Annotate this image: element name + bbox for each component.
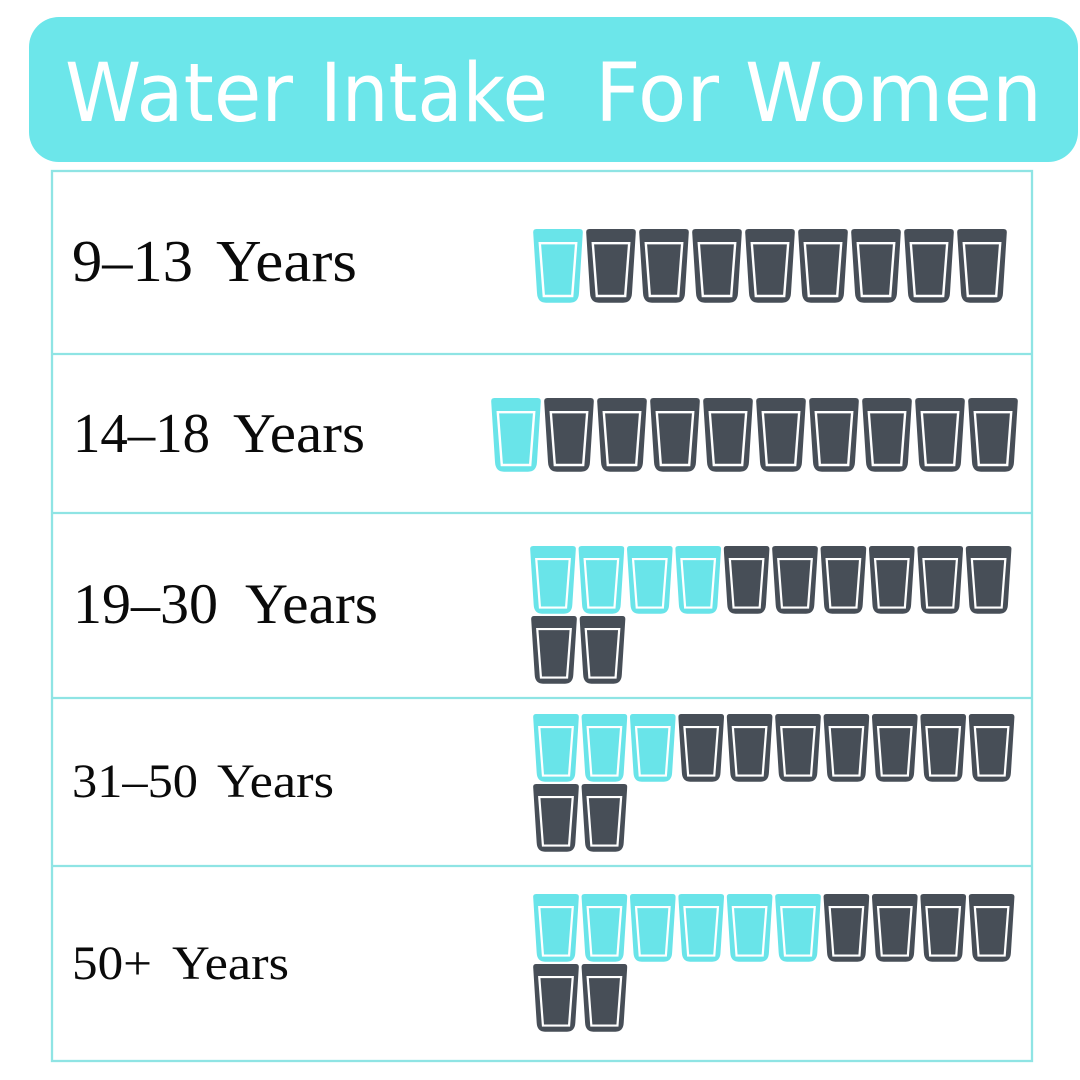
table grid <box>52 171 1032 1061</box>
title text: Water <box>65 47 294 141</box>
icons: 3 of 12 glasses filled <box>533 714 1014 852</box>
icons: 1 of 10 glasses filled <box>491 398 1018 472</box>
label: 50+ years: 50+ <box>72 937 152 990</box>
label: 19–30 years: Years <box>245 573 378 636</box>
label: 9–13 years: 9–13 <box>72 228 193 294</box>
label: 50+ years: Years <box>172 937 289 990</box>
title text: For <box>595 47 720 141</box>
row: 14–18 years <box>73 398 1018 472</box>
icons: 4 of 12 glasses filled <box>530 546 1011 684</box>
label: 14–18 years: 14–18 <box>73 403 210 465</box>
title banner <box>29 17 1078 162</box>
title text: Intake <box>320 47 548 141</box>
label: 9–13 years: Years <box>216 228 357 294</box>
row: 31–50 years <box>72 714 1014 852</box>
label: 31–50 years: 31–50 <box>72 755 198 808</box>
row: 9–13 years <box>72 228 1007 303</box>
title text: Women <box>745 47 1042 141</box>
row: 19–30 years <box>73 546 1011 684</box>
row: 50+ years <box>72 894 1014 1032</box>
icons: 6 of 12 glasses filled <box>533 894 1014 1032</box>
label: 14–18 years: Years <box>233 403 365 465</box>
label: 19–30 years: 19–30 <box>73 573 218 636</box>
icons: 1 of 9 glasses filled <box>533 229 1007 303</box>
label: 31–50 years: Years <box>217 755 334 808</box>
